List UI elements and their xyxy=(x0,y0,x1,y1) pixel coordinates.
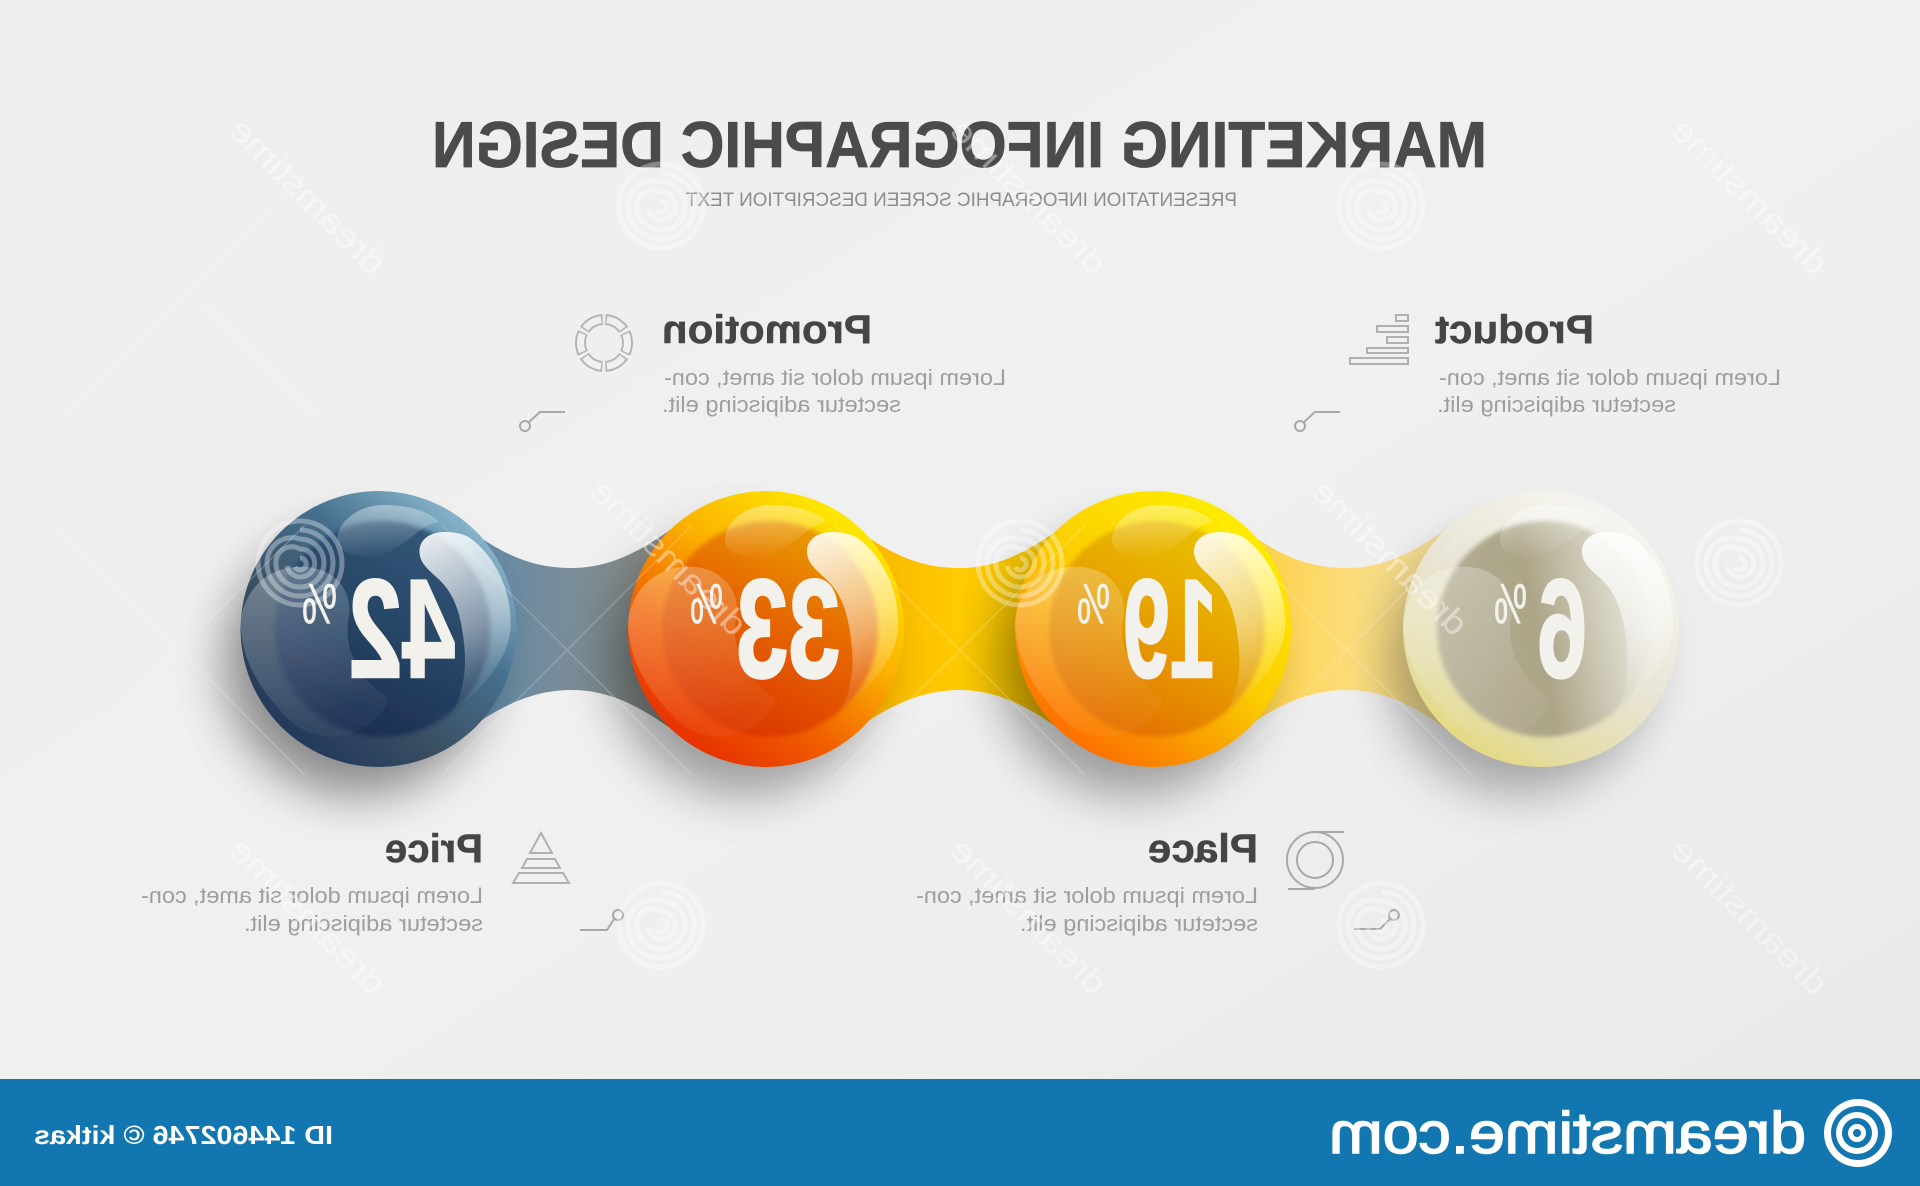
icon: pyramid xyxy=(513,833,569,883)
sphere: 6 percent xyxy=(1389,491,1679,793)
icon: rings xyxy=(1287,832,1344,889)
value: 19: 19 xyxy=(1123,550,1217,707)
watermark: wordmarks: dreamstime xyxy=(1663,111,1835,283)
shadow xyxy=(224,531,488,795)
connector: blue to red xyxy=(470,530,670,728)
watermark: wordmarks: dreamstime xyxy=(1663,831,1835,1003)
watermark: crosses xyxy=(55,165,1472,775)
icon: logo spiral xyxy=(1824,1099,1892,1167)
watermark: wordmarks: dreamstime xyxy=(221,831,393,1003)
icon: segmented ring xyxy=(580,320,628,366)
footer bar xyxy=(0,1079,1920,1186)
percent sign: % xyxy=(690,572,723,636)
sphere body xyxy=(628,491,904,767)
heading: price: Price xyxy=(385,827,483,871)
text block: product: Lorem ipsum dolor sit amet, con- xyxy=(1439,365,1781,390)
value: 33: 33 xyxy=(736,550,840,707)
text block: place: Lorem ipsum dolor sit amet, con- xyxy=(916,883,1258,908)
value: 42: 42 xyxy=(348,550,456,707)
image id credit: ID 144602746 © kitkas xyxy=(34,1120,333,1150)
text block: place xyxy=(916,883,1258,936)
chain connectors xyxy=(470,530,1445,728)
text block: place: sectetur adipiscing elit. xyxy=(1020,911,1258,936)
watermark: spirals xyxy=(258,164,1781,967)
percent sign: % xyxy=(1077,572,1110,636)
connector: yellow to cream xyxy=(1245,530,1445,728)
heading: promotion: Promotion xyxy=(662,308,872,352)
heading: place: Place xyxy=(1148,827,1258,871)
text block: promotion xyxy=(662,365,1006,417)
text block: price xyxy=(141,883,483,936)
sphere body xyxy=(1403,491,1679,767)
value: 6: 6 xyxy=(1537,550,1587,707)
sphere body xyxy=(240,491,516,767)
watermark: wordmarks: dreamstime xyxy=(942,111,1114,283)
shadow xyxy=(1389,533,1649,793)
logo wordmark: dreamstime.com xyxy=(1329,1101,1806,1166)
text block: product xyxy=(1437,365,1781,417)
panel: promotion xyxy=(520,308,1006,431)
icon: stacked bars xyxy=(1350,315,1408,364)
panel: place xyxy=(916,827,1399,936)
sphere body xyxy=(1015,491,1291,767)
text block: product: sectetur adipiscing elit. xyxy=(1437,392,1676,417)
percent sign: % xyxy=(302,572,337,636)
connector: promotion xyxy=(520,412,565,431)
watermark: wordmarks: dreamstime xyxy=(942,831,1114,1003)
watermark: wordmarks: dreamstime xyxy=(221,111,393,283)
sphere: 42 percent xyxy=(224,491,516,795)
subtitle: PRESENTATION INFOGRAPHIC SCREEN DESCRIPTION TEXT xyxy=(686,190,1237,211)
heading: product: Product xyxy=(1435,308,1594,352)
connector: red to yellow xyxy=(858,530,1058,728)
connector: price xyxy=(580,910,623,930)
watermark: wordmarks: dreamstime xyxy=(582,472,754,644)
connector: product xyxy=(1295,412,1340,431)
title: MARKETING INFOGRAPHIC DESIGN xyxy=(432,108,1487,181)
text block: promotion: Lorem ipsum dolor sit amet, con- xyxy=(664,365,1006,390)
sphere: 33 percent xyxy=(612,491,904,795)
text block: price: sectetur adipiscing elit. xyxy=(244,911,483,936)
shadow xyxy=(999,531,1263,795)
watermark: wordmarks xyxy=(221,111,1835,1003)
percent sign: % xyxy=(1494,572,1527,636)
text block: promotion: sectetur adipiscing elit. xyxy=(662,392,901,417)
sphere: 19 percent xyxy=(999,491,1291,795)
panel: product xyxy=(1295,308,1781,431)
watermark overlay xyxy=(55,111,1835,1003)
watermark: wordmarks: dreamstime xyxy=(1303,472,1475,644)
connector: place xyxy=(1354,910,1399,929)
text block: price: Lorem ipsum dolor sit amet, con- xyxy=(141,883,483,908)
panel: price xyxy=(141,827,623,936)
shadow xyxy=(612,531,876,795)
